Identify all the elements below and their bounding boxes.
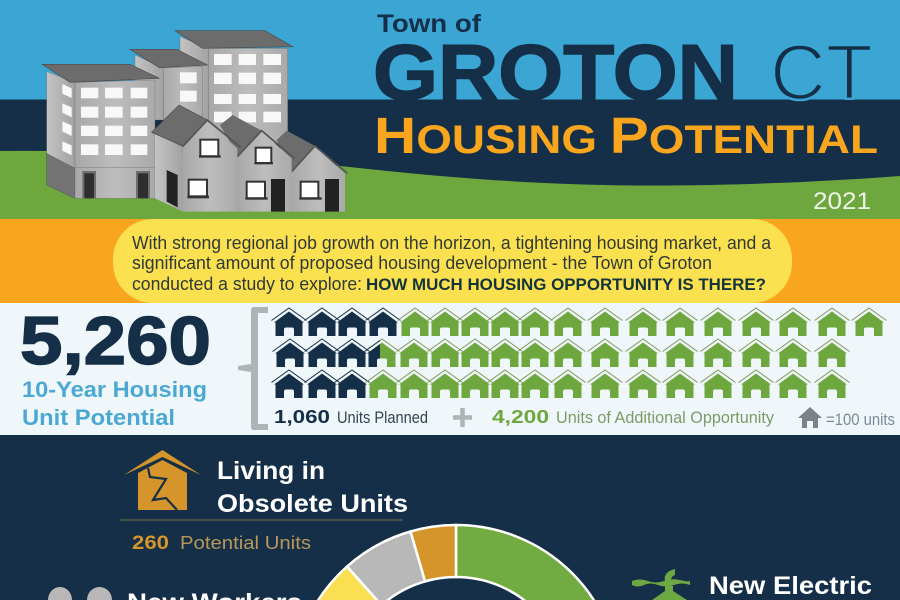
icon: cracked house [124, 450, 201, 510]
heading: Living in Obsolete Units: Living in [217, 457, 325, 485]
heading: Living in Obsolete Units: Obsolete Units [217, 490, 408, 518]
background: header sky [0, 0, 900, 100]
stat: 260 potential units [132, 533, 311, 554]
stat: units planned: Units Planned [337, 408, 428, 427]
intro text line 1: With strong regional job growth on the horizon, a tightening housing market, and a [132, 233, 772, 253]
label: 10-Year Housing Unit Potential: Unit Potential [22, 405, 175, 430]
segment: grey [347, 532, 425, 600]
pictogram: row 1 [272, 308, 886, 336]
house: first [152, 105, 241, 212]
intro text line 2: significant amount of proposed housing development - the Town of Groton [132, 253, 712, 273]
intro text line 3: conducted a study to explore: [132, 274, 362, 294]
illustration: apartment buildings and houses [42, 31, 347, 212]
bracket [238, 307, 268, 430]
band: orange intro strip [0, 219, 900, 303]
label: 10-Year Housing Unit Potential [22, 377, 207, 430]
icon: worker helmets [48, 587, 112, 600]
big number: 5,260 [20, 303, 211, 379]
legend: house equals 100 units [798, 407, 895, 429]
background: navy band [0, 100, 900, 224]
heading: Living in Obsolete Units [217, 457, 408, 518]
stat: additional opportunity: Units of Additional Opportunity [556, 408, 774, 427]
background: green hill [0, 151, 900, 222]
panel: intro pill [113, 219, 792, 303]
building: middle [130, 49, 207, 123]
house: second [220, 115, 295, 212]
stat: 260 potential units: Potential Units [180, 533, 311, 553]
title: CT: CT [770, 28, 873, 116]
pictogram: row 2 [272, 339, 850, 367]
stat: units planned: 1,060 [274, 407, 330, 427]
plus sign [453, 408, 472, 427]
chart: donut [292, 525, 620, 600]
icon: electric [632, 569, 690, 600]
title: Town of: Town of [377, 10, 482, 38]
heading: New Electric: New Electric [709, 572, 872, 600]
stat: units planned [274, 407, 428, 427]
building: left [42, 64, 159, 198]
pictogram: row 3 [272, 370, 850, 398]
label: 10-Year Housing Unit Potential: 10-Year Housing [22, 377, 207, 402]
segment: yellow [292, 566, 382, 600]
house: third [277, 131, 347, 212]
title: Housing Potential: HOUSING POTENTIAL [374, 107, 878, 164]
building: tall right [175, 31, 293, 143]
panel: navy lower section [0, 435, 900, 600]
segment: obsolete units [410, 525, 456, 581]
stat: additional opportunity: 4,200 [492, 407, 549, 427]
stat: 260 potential units: 260 [132, 533, 169, 554]
panel: housing potential band [0, 303, 900, 435]
segment: new electric [456, 525, 620, 600]
intro question: HOW MUCH HOUSING OPPORTUNITY IS THERE? [366, 275, 766, 294]
title: GROTON: GROTON [373, 28, 738, 116]
year: 2021 [813, 188, 871, 215]
